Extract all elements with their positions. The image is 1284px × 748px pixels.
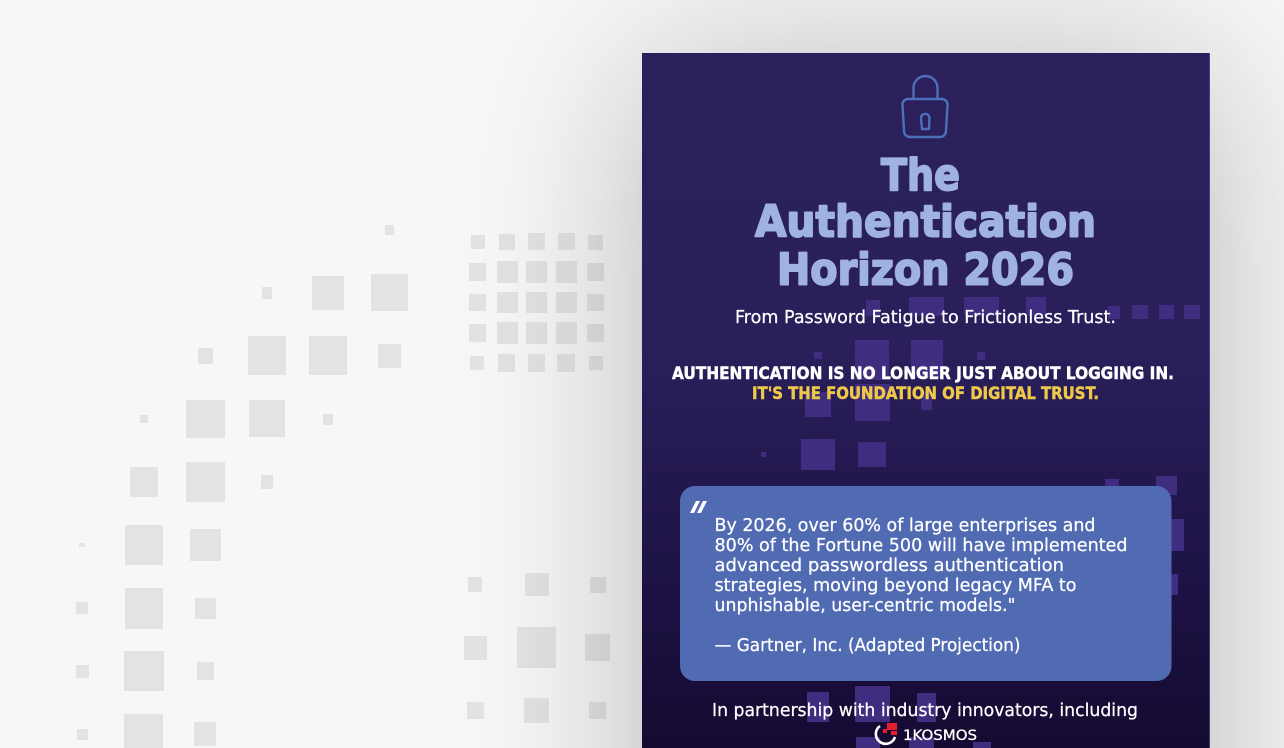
quote text: strategies, moving beyond legacy MFA to: [714, 575, 1076, 596]
logo mark: [876, 723, 897, 744]
poster right edge highlight: [1209, 53, 1210, 748]
icon: padlock: [902, 76, 948, 137]
title: [755, 150, 1096, 296]
quote text: 80% of the Fortune 500 will have implemented: [714, 535, 1128, 556]
poster background: [642, 53, 1210, 748]
partnership line: In partnership with industry innovators, including: [712, 700, 1138, 721]
title: The: [881, 150, 960, 201]
title: Authentication: [755, 196, 1096, 248]
card background: [680, 486, 1172, 681]
icon: quotation mark: [690, 501, 707, 513]
quote attribution: — Gartner, Inc. (Adapted Projection): [714, 635, 1020, 656]
poster pixel squares: [761, 297, 1200, 748]
quote text: [714, 515, 1128, 616]
subtitle: From Password Fatigue to Frictionless Trust.: [735, 307, 1116, 328]
logo wordmark: 1KOSMOS: [903, 728, 977, 744]
headline: AUTHENTICATION IS NO LONGER JUST ABOUT LOGGING IN.: [672, 364, 1174, 384]
headline: IT'S THE FOUNDATION OF DIGITAL TRUST.: [752, 384, 1099, 404]
quote card: [680, 486, 1172, 681]
quote text: advanced passwordless authentication: [714, 555, 1064, 576]
quote text: unphishable, user-centric models.": [714, 595, 1016, 616]
title: Horizon 2026: [777, 244, 1074, 296]
logo: 1Kosmos: [876, 723, 977, 744]
poster drop shadow: [642, 68, 1210, 748]
quote text: By 2026, over 60% of large enterprises and: [714, 515, 1096, 536]
headline: [672, 364, 1174, 404]
